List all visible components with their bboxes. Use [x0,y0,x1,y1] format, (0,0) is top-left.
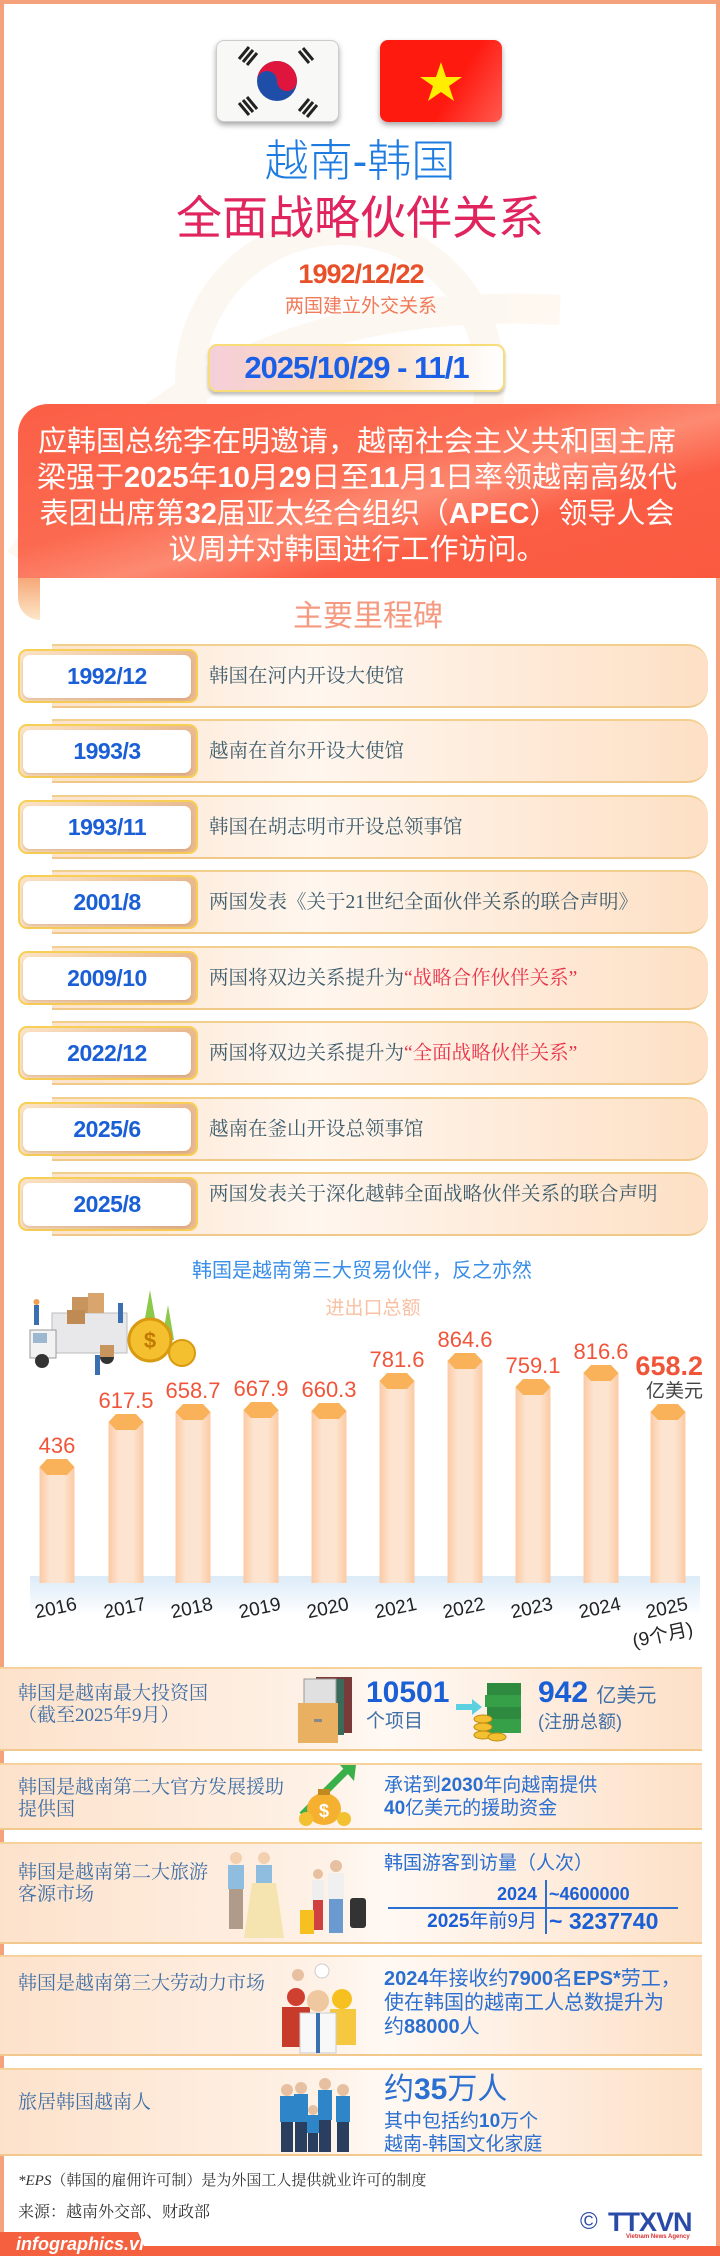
milestone 1992/12 [18,644,708,708]
milestone 2001/8 [18,870,708,934]
decorative swirl background [8,230,561,558]
flag: Korea [216,40,339,122]
panel: labour: 2024年接收约7900名EPS*劳工， [384,1968,681,1990]
source: 来源：越南外交部、财政部 [18,2204,210,2221]
banner: visit description [18,404,720,578]
milestone 1992/12: 1992/12 [67,663,147,689]
panel: diaspora: 旅居韩国越南人 [18,2092,151,2113]
bar chart: trade 2016-2025: 667.9 [233,1376,289,1401]
trade heading: 韩国是越南第三大贸易伙伴，反之亦然 [192,1260,532,1282]
milestone 2022/12 [18,1021,708,1085]
footer bar [0,2246,720,2256]
milestone 2025/8: 2025/8 [73,1191,141,1217]
table: visitors: 2024 [497,1884,537,1904]
milestone 1993/11: 韩国在胡志明市开设总领事馆 [209,817,463,838]
panel: diaspora [0,2068,702,2156]
icon: workers [282,1964,356,2054]
panel: labour: 韩国是越南第三大劳动力市场 [18,1973,265,1994]
established date: 两国建立外交关系 [285,296,437,317]
milestone 2025/6: 越南在釜山开设总领事馆 [209,1119,424,1140]
table: visitors: ~ 3237740 [549,1908,658,1934]
bar chart: trade 2016-2025 [30,1327,703,1652]
panel: diaspora: 越南-韩国文化家庭 [384,2134,542,2155]
icon: money [474,1683,521,1742]
milestone 1992/12: 韩国在河内开设大使馆 [209,666,404,687]
icon: family [280,2078,350,2152]
bar chart: trade 2016-2025: 436 [39,1433,75,1458]
icon: truck and coins [30,1290,196,1375]
title: 全面战略伙伴关系 [176,192,544,244]
bar chart: trade 2016-2025: 759.1 [505,1353,561,1378]
date box [208,344,505,392]
logo: TTXVN [580,2207,692,2240]
milestone 1993/3: 越南在首尔开设大使馆 [209,741,404,762]
milestone 2025/6: 2025/6 [73,1116,141,1142]
icon: hanbok people and travelers [228,1852,366,1938]
table: visitors [388,1880,678,1934]
banner: visit description: 表团出席第32届亚太经合组织（APEC）领导人会 [40,498,674,530]
milestone 1993/11: 1993/11 [68,814,146,840]
milestone 1993/3: 1993/3 [73,738,141,764]
panel: labour: 约88000人 [384,2016,480,2038]
bar chart: trade 2016-2025: 2023 [509,1594,555,1623]
bar chart: trade 2016-2025: 658.7 [165,1378,221,1403]
title [176,137,544,244]
panel: investment [0,1667,702,1751]
icon: truck and coins: $ [144,1328,156,1353]
bar chart: trade 2016-2025: 781.6 [369,1347,425,1372]
panel: tourism: 韩国是越南第二大旅游 [18,1862,208,1883]
panel: ODA: 韩国是越南第二大官方发展援助 [18,1777,284,1798]
milestone 1993/3 [18,719,708,783]
bar chart: trade 2016-2025: 2022 [441,1594,487,1623]
panel: investment: （截至2025年9月） [18,1705,180,1726]
milestone 2025/8 [18,1172,708,1236]
bar chart: trade 2016-2025: 660.3 [301,1377,357,1402]
milestone 2001/8: 两国发表《关于21世纪全面伙伴关系的联合声明》 [209,892,638,913]
milestone 2009/10: 两国将双边关系提升为“战略合作伙伴关系” [209,968,577,989]
panel: ODA: 40亿美元的援助资金 [384,1798,557,1819]
milestone 2025/6 [18,1097,708,1161]
panel: tourism: 韩国游客到访量（人次） [384,1853,593,1874]
established date [285,259,437,317]
milestone 2001/8: 2001/8 [73,889,141,915]
footnote: *EPS（韩国的雇佣许可制）是为外国工人提供就业许可的制度 [18,2173,426,2189]
milestone 2022/12: 两国将双边关系提升为“全面战略伙伴关系” [209,1043,577,1064]
panel: ODA [0,1763,702,1830]
panel: tourism: 客源市场 [18,1884,94,1905]
icon: money bag with arrow: $ [319,1801,329,1821]
panel: ODA: 承诺到2030年向越南提供 [384,1775,597,1796]
panel: investment: 942 亿美元 [538,1676,656,1709]
bar chart: trade 2016-2025: 2017 [102,1594,148,1623]
panel: tourism [0,1842,702,1944]
date box: 2025/10/29 - 11/1 [244,350,469,385]
panel: diaspora: 约35万人 [384,2073,507,2106]
icon: folders [298,1677,352,1743]
icon: money bag with arrow [299,1765,356,1826]
chart subtitle: 进出口总额 [325,1298,420,1319]
table: visitors: ~4600000 [549,1884,630,1904]
milestone 2009/10 [18,946,708,1010]
bar chart: trade 2016-2025: 864.6 [437,1327,493,1352]
banner: visit description: 议周并对韩国进行工作访问。 [168,534,546,566]
panel: investment: (注册总额) [538,1712,622,1732]
bar chart: trade 2016-2025: 617.5 [98,1388,154,1413]
arrow [456,1699,482,1715]
milestone 2022/12: 2022/12 [67,1040,147,1066]
bar chart: trade 2016-2025: 2018 [169,1594,215,1623]
bar chart: trade 2016-2025: 2025 [644,1594,690,1623]
bar chart: trade 2016-2025: 816.6 [573,1339,629,1364]
milestone 1993/11 [18,795,708,859]
banner curl [18,578,40,620]
bar chart: trade 2016-2025: 2021 [373,1594,419,1623]
panel: investment: 10501 [366,1676,449,1709]
panel: investment: 韩国是越南最大投资国 [18,1683,208,1704]
logo: TTXVN: © [580,2208,598,2235]
panel: diaspora: 其中包括约10万个 [384,2111,538,2132]
table: visitors: 2025年前9月 [427,1911,537,1932]
bar chart: trade 2016-2025: 2016 [33,1594,79,1623]
panel: labour: 使在韩国的越南工人总数提升为 [384,1992,664,2014]
bar chart: trade 2016-2025: 2020 [305,1594,351,1623]
milestone 2025/8: 两国发表关于深化越韩全面战略伙伴关系的联合声明 [209,1184,658,1205]
bar chart: trade 2016-2025: (9个月) [631,1618,695,1652]
panel: investment: 个项目 [366,1711,423,1732]
banner: visit description: 梁强于2025年10月29日至11月1日率领越南高级代 [37,462,677,494]
logo: TTXVN: Vietnam News Agency [626,2234,690,2240]
footer tab: infographics.vn: infographics.vn [16,2234,150,2254]
title: 越南-韩国 [265,137,455,186]
established date: 1992/12/22 [298,259,424,289]
bar chart: trade 2016-2025: 亿美元 [646,1376,703,1403]
heading: milestones: 主要里程碑 [293,600,443,633]
flag: Vietnam [380,40,502,122]
panel: ODA: 提供国 [18,1799,75,1820]
bar chart: trade 2016-2025: 658.2 [635,1351,703,1381]
panel: labour [0,1955,702,2056]
bar chart: trade 2016-2025: 2019 [237,1594,283,1623]
logo: TTXVN: TTXVN [608,2207,692,2237]
banner: visit description: 应韩国总统李在明邀请，越南社会主义共和国主席 [38,426,676,458]
milestone 2009/10: 2009/10 [67,965,147,991]
bar chart: trade 2016-2025: 2024 [577,1594,623,1623]
